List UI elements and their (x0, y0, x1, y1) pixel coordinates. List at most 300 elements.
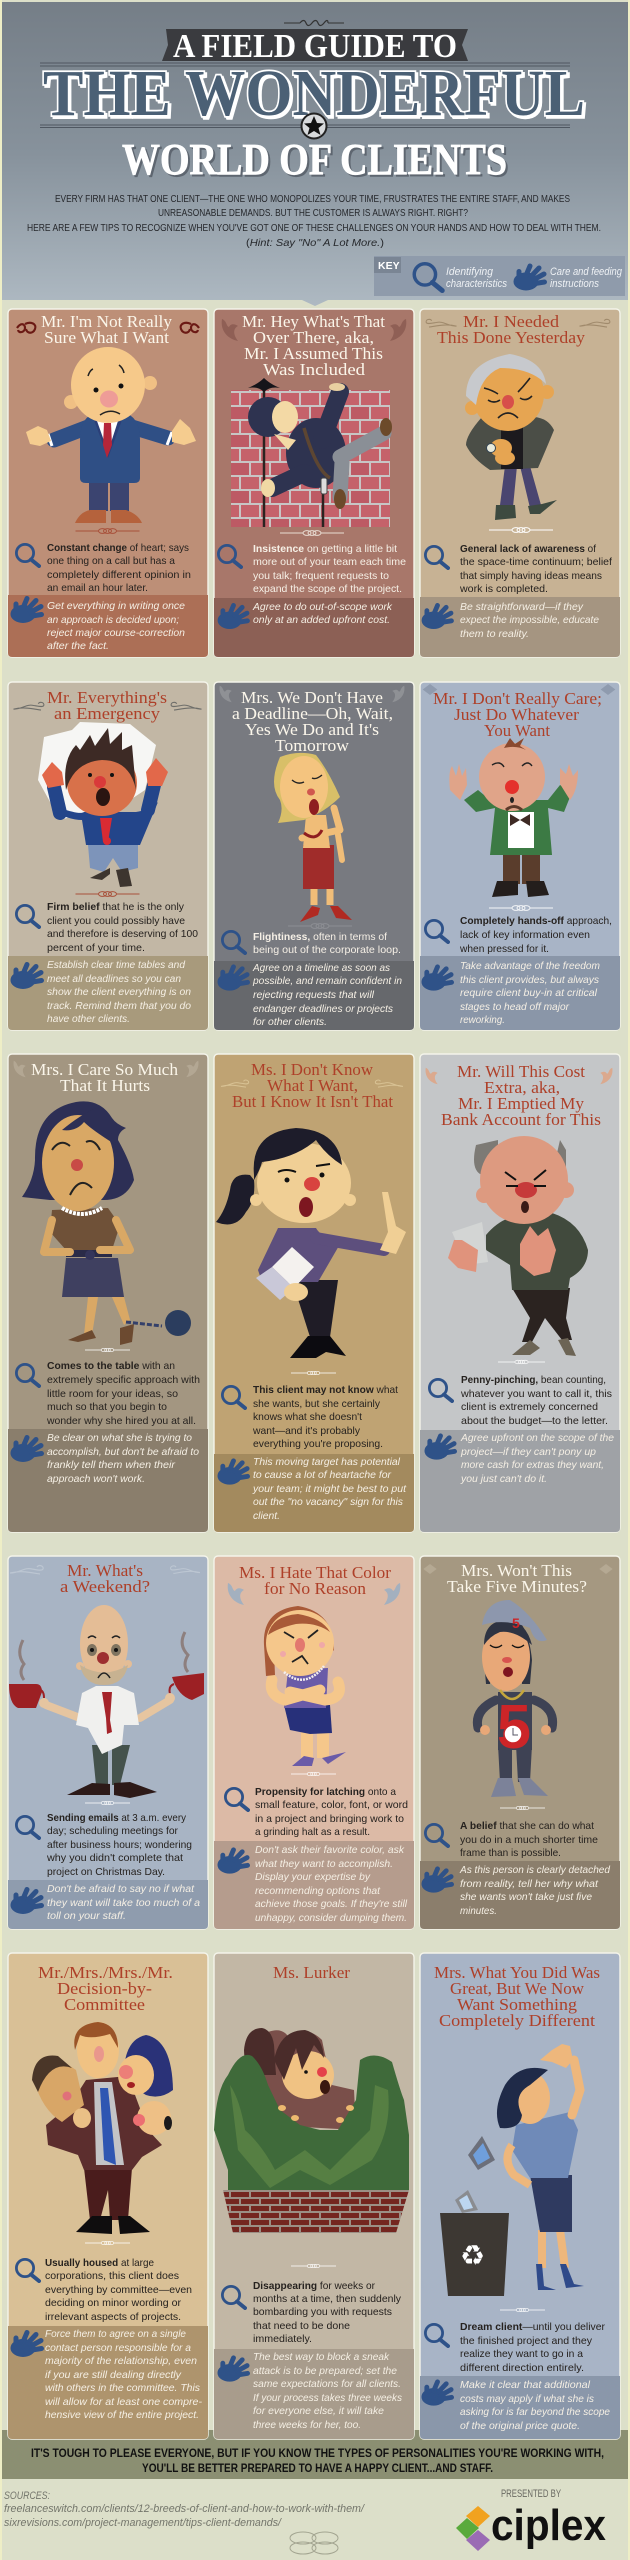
title (232, 688, 393, 755)
identifying characteristics: you do in a much shorter time (460, 1834, 598, 1846)
ornament (426, 1068, 612, 1084)
identifying characteristics: you talk; frequent requests to (253, 570, 389, 582)
care instructions: rejecting requests that will (253, 989, 375, 1001)
character: woman behind hedge (214, 2028, 409, 2233)
identifying characteristics (253, 543, 406, 595)
icon: magnifier (222, 1386, 245, 1408)
identifying characteristics: day; scheduling meetings for (47, 1825, 178, 1837)
identifying characteristics: Flightiness, often in terms of (253, 931, 387, 943)
panel: Mrs. What You Did Was Great (420, 1953, 620, 2439)
care instructions: contact person responsible for a (45, 2342, 191, 2354)
care instructions: possible, and remain confident in (252, 975, 402, 987)
identifying characteristics: client is extremely concerned (461, 1401, 598, 1413)
title (38, 1963, 173, 2014)
identifying characteristics: Dream client—until you deliver (460, 2321, 605, 2333)
character: man checking watch (465, 354, 557, 520)
title: Was Included (263, 360, 366, 379)
icon: magnifier (429, 1379, 452, 1401)
ornament (228, 1583, 400, 1605)
care instructions (252, 962, 402, 1028)
care instructions (47, 1883, 200, 1922)
identifying characteristics: and therefore is deserving of 100 (47, 928, 198, 940)
identifying characteristics: bombarding you with requests (253, 2306, 392, 2318)
ornament (423, 1564, 613, 1574)
care instructions: track. Remind them that you do (47, 1000, 191, 1012)
identifying characteristics: she wants, but she certainly (253, 1398, 381, 1410)
title (437, 312, 586, 347)
sources: SOURCES: (4, 2490, 50, 2502)
care instructions: Don't ask their favorite color, ask (255, 1844, 405, 1856)
identifying characteristics (252, 1384, 398, 1450)
care instructions: minutes. (460, 1905, 497, 1917)
identifying characteristics (459, 915, 612, 955)
identifying characteristics: General lack of awareness of (460, 543, 596, 555)
identifying characteristics: frame than is possible. (460, 1847, 561, 1859)
icon: hand (218, 605, 247, 629)
title: Mr. I Don't Really Care; (433, 689, 602, 708)
panel: Mr. I'm Not Really Sure What I Want (8, 309, 208, 657)
identifying characteristics: Propensity for latching onto a (255, 1786, 396, 1798)
identifying characteristics: project on Christmas Day. (47, 1866, 165, 1878)
icon: magnifier (425, 546, 448, 568)
identifying characteristics: being out of the corporate loop. (253, 944, 401, 956)
care instructions (47, 959, 191, 1025)
identifying characteristics: extremely specific approach with (47, 1374, 200, 1386)
icon: hand (218, 1461, 248, 1484)
panel: Mr. I Needed This Done Yesterday (420, 309, 620, 657)
care instructions: for everyone else, it will take (253, 2405, 384, 2417)
divider (489, 906, 553, 910)
divider (500, 2308, 545, 2312)
identifying characteristics: months at a time, then suddenly (253, 2293, 402, 2305)
key legend: instructions (550, 278, 599, 290)
divider (85, 1801, 130, 1805)
panel: Ms. Lurker (214, 1953, 414, 2439)
panel: Mrs. I Care So Much That It Hurts (8, 1054, 208, 1532)
title: Bank Account for This (441, 1110, 601, 1129)
title: Mr. I Emptied My (458, 1094, 585, 1113)
divider (85, 2241, 130, 2245)
care instructions: she wants won't take just five (460, 1891, 592, 1903)
identifying characteristics: one thing on a call but has a (47, 555, 175, 567)
character: man with bow tie (449, 738, 578, 897)
care instructions: attack is to be prepared; set the (253, 2365, 397, 2377)
care instructions: them to reality. (460, 628, 529, 640)
identifying characteristics: Sending emails at 3 a.m. every (47, 1812, 187, 1824)
title: Mr. Hey What's That (242, 312, 385, 331)
intro text: (Hint: Say "No" A Lot More. ) (246, 237, 384, 249)
title: Mr. I Needed (463, 312, 560, 331)
ornament (14, 702, 202, 710)
sources (4, 2490, 365, 2529)
care instructions: Get everything in writing once (47, 600, 185, 612)
care instructions: costs may apply if what she is (460, 2393, 595, 2405)
divider (85, 1348, 130, 1352)
title (239, 1563, 391, 1598)
icon: magnifier (425, 920, 448, 942)
identifying characteristics: Disappearing for weeks or (253, 2280, 375, 2292)
care instructions (255, 1844, 408, 1924)
care instructions: Agree on a timeline as soon as (252, 962, 391, 974)
icon: hand (11, 1438, 42, 1462)
title: What I Want, (267, 1076, 358, 1095)
identifying characteristics: after business hours; wondering (47, 1839, 192, 1851)
divider (76, 529, 140, 533)
icon: hand (11, 964, 42, 988)
panel: Mrs. We Don't Have a Deadline (214, 682, 414, 1030)
character: woman throwing away work: ♻ (460, 2239, 485, 2272)
divider (489, 528, 553, 532)
identifying characteristics (460, 2321, 605, 2374)
care instructions: If your process takes three weeks (253, 2392, 403, 2404)
panel: Mr. Will This Cost Extra (420, 1054, 620, 1532)
care instructions: The best way to block a sneak (253, 2351, 390, 2363)
care instructions: reworking. (460, 1014, 505, 1026)
heading banner: a field guide to: A FIELD GUIDE TO (173, 28, 457, 65)
identifying characteristics: Usually housed at large (45, 2257, 154, 2269)
character: tired man with coffee (9, 1605, 204, 1798)
title: Over There, aka, (253, 328, 374, 347)
care instructions: accomplish, but don't be afraid to (47, 1446, 199, 1458)
identifying characteristics: much so that you begin to (47, 1401, 167, 1413)
care instructions: Force them to agree on a single (45, 2328, 186, 2340)
character: many-headed committee (32, 2022, 173, 2234)
icon: magnifier (218, 545, 241, 567)
sources: sixrevisions.com/project-management/tips-client-demands/ (4, 2517, 282, 2529)
care instructions: Agree upfront on the scope of the (460, 1432, 614, 1444)
title (447, 1561, 587, 1596)
identifying characteristics: wonder why she hired you at all. (46, 1415, 196, 1427)
divider (76, 892, 140, 896)
identifying characteristics: a grinding halt as a result. (255, 1826, 370, 1838)
panel: Mr. Hey What's That Over There (214, 309, 414, 657)
identifying characteristics: Insistence on getting a little bit (253, 543, 397, 555)
care instructions: meet all deadlines so you can (47, 973, 181, 985)
title: Just Do Whatever (454, 705, 579, 724)
care instructions: this client provides, but always (460, 974, 600, 986)
title: an Emergency (54, 704, 161, 723)
icon: hand (422, 967, 452, 990)
identifying characteristics: work is completed. (459, 583, 548, 595)
title: Mr. Will This Cost (457, 1062, 585, 1081)
icon: magnifier (222, 2286, 245, 2308)
care instructions: majority of the relationship, even (45, 2355, 197, 2367)
care instructions: an approach is decided upon; (47, 614, 179, 626)
identifying characteristics: Completely hands-off approach, (460, 915, 612, 927)
title: Mrs. I Care So Much (31, 1060, 179, 1079)
icon: hand (422, 2382, 452, 2405)
header panel (2, 2, 628, 306)
identifying characteristics (46, 1812, 192, 1878)
character: man climbing brick wall (231, 378, 392, 527)
icon: magnifier (16, 2259, 39, 2281)
title: for No Reason (264, 1579, 367, 1598)
icon: magnifier (16, 1816, 39, 1838)
icon: hand (11, 1890, 42, 1914)
care instructions: for other clients. (253, 1016, 327, 1028)
icon: hand (422, 1869, 452, 1892)
panel: Mr. What's a Weekend (8, 1556, 208, 1929)
divider (288, 924, 352, 928)
ornament (221, 1080, 403, 1087)
title (441, 1062, 601, 1129)
title: Mr. I Assumed This (244, 344, 383, 363)
care instructions: endanger deadlines or projects (253, 1003, 394, 1015)
care instructions (460, 601, 599, 640)
care instructions (460, 2379, 610, 2432)
care instructions: unhappy, consider dumping them. (255, 1912, 407, 1924)
identifying characteristics: little room for your ideas, so (47, 1388, 178, 1400)
care instructions: of the original price quote. (460, 2420, 580, 2432)
character: penny-pinching man (448, 1136, 588, 1356)
panel: Mr. I Don't Really Care (420, 682, 620, 1030)
care instructions: only at an added upfront cost. (253, 614, 390, 626)
identifying characteristics: in a project and bringing work to (255, 1813, 404, 1825)
title: Sure What I Want (44, 328, 169, 347)
identifying characteristics: want—and it's probably (252, 1425, 361, 1437)
identifying characteristics (253, 2280, 402, 2345)
ornament (222, 319, 406, 341)
identifying characteristics: immediately. (253, 2333, 312, 2345)
title: Extra, aka, (484, 1078, 560, 1097)
care instructions (252, 601, 393, 626)
identifying characteristics: the finished project and they (460, 2335, 593, 2347)
divider (291, 2264, 336, 2268)
divider (280, 531, 344, 535)
care instructions: if you are still dealing directly (45, 2369, 182, 2381)
identifying characteristics (47, 901, 198, 954)
icon: magnifier (425, 2324, 448, 2346)
title: a Deadline—Oh, Wait, (232, 704, 393, 723)
identifying characteristics (253, 931, 401, 956)
icon: hand (218, 967, 248, 990)
care instructions: out the "no vacancy" sign for this (253, 1496, 404, 1508)
title: Take Five Minutes? (447, 1577, 587, 1596)
title: Mr. What's (67, 1561, 143, 1580)
identifying characteristics: deciding on minor wording or (45, 2297, 182, 2309)
title: Want Something (457, 1995, 578, 2014)
identifying characteristics: corporations, this client does (45, 2270, 179, 2282)
care instructions: frankly tell them when their (47, 1459, 176, 1471)
care instructions: project—if they can't pony up (460, 1446, 596, 1458)
title: Tomorrow (275, 736, 350, 755)
title: That It Hurts (60, 1076, 150, 1095)
icon: hand (425, 1436, 455, 1459)
heading: the wonderful: THE WONDERFUL (43, 57, 585, 130)
key legend: characteristics (446, 278, 507, 290)
care instructions: reject major course-correction (47, 627, 185, 639)
identifying characteristics: irrelevant aspects of projects. (45, 2311, 181, 2323)
icon: hand (218, 2358, 248, 2381)
panel: Ms. I Hate That Color (214, 1556, 414, 1929)
title: Ms. I Hate That Color (239, 1563, 391, 1582)
care instructions: Display your expertise by (255, 1871, 371, 1883)
care instructions: three weeks for her, too. (253, 2419, 361, 2431)
character: woman with ball and chain (22, 1101, 191, 1345)
icon: star badge (302, 114, 326, 138)
character: woman with ponytail (216, 1128, 406, 1358)
care instructions: will allow for at least one compre- (45, 2396, 203, 2408)
care instructions: stages to head off major (460, 1001, 569, 1013)
identifying characteristics: everything you're proposing. (253, 1438, 383, 1450)
key legend (374, 256, 625, 296)
title: Mrs. What You Did Was (434, 1963, 600, 1982)
care instructions: they want will take too much of a (47, 1897, 200, 1909)
care instructions: achieve those goals. If they're still (255, 1898, 408, 1910)
care instructions: asking for is far beyond the scope (460, 2406, 610, 2418)
title (60, 1561, 150, 1596)
care instructions: This moving target has potential (253, 1456, 401, 1468)
divider (498, 1360, 545, 1364)
ornament (423, 684, 615, 695)
care instructions: have other clients. (47, 1013, 130, 1025)
care instructions: Establish clear time tables and (47, 959, 186, 971)
title: Decision-by- (57, 1979, 152, 1998)
icon: magnifier (16, 905, 39, 927)
title: Mr. I'm Not Really (41, 312, 172, 331)
care instructions: after the fact. (47, 640, 109, 652)
title: Yes We Do and It's (245, 720, 379, 739)
footer band background (2, 2430, 628, 2479)
title (434, 1963, 600, 2030)
character: panicking man (38, 722, 168, 887)
divider (291, 1772, 336, 1776)
icon: magnifier (16, 1364, 39, 1386)
care instructions: expect the impossible, educate (460, 614, 599, 626)
care instructions: from reality, tell her why what (460, 1878, 599, 1890)
identifying characteristics: completely different opinion in (47, 569, 191, 581)
identifying characteristics: whatever you want to call it, this (460, 1388, 612, 1400)
icon: magnifier (222, 931, 245, 953)
title: Mrs. We Don't Have (241, 688, 383, 707)
identifying characteristics: why you didn't complete that (46, 1852, 183, 1864)
title: You Want (484, 721, 550, 740)
care instructions (460, 1432, 614, 1485)
care instructions: to cause a lot of heartache for (253, 1469, 391, 1481)
care instructions (459, 1864, 611, 1917)
care instructions: approach won't work. (47, 1473, 145, 1485)
care instructions: As this person is clearly detached (459, 1864, 611, 1876)
ornament (10, 1566, 200, 1574)
identifying characteristics: small feature, color, font, or word (255, 1799, 408, 1811)
identifying characteristics (459, 543, 612, 595)
care instructions (253, 2351, 403, 2431)
character: woman throwing away work (440, 2044, 584, 2296)
title: Completely Different (439, 2011, 595, 2030)
intro text (27, 193, 601, 249)
character: woman with crossed arms (264, 1606, 346, 1766)
sources: freelanceswitch.com/clients/12-breeds-of-client-and-how-to-work-with-them/ (4, 2503, 365, 2515)
logo: ciplex: ciplex (491, 2501, 606, 2550)
title: Ms. I Don't Know (251, 1060, 374, 1079)
title: Great, But We Now (450, 1979, 585, 1998)
care instructions: show the client everything is on (47, 986, 191, 998)
identifying characteristics: knows what she doesn't (253, 1411, 362, 1423)
icon: hand (218, 1850, 248, 1873)
care instructions: hensive view of the entire project. (45, 2409, 199, 2421)
character: woman with number five: 5 (497, 1693, 531, 1762)
title (41, 312, 172, 347)
key legend: KEY (378, 260, 400, 272)
care instructions: Be clear on what she is trying to (47, 1432, 192, 1444)
title (433, 689, 602, 740)
identifying characteristics: Constant change of heart; says (47, 542, 189, 554)
identifying characteristics: when pressed for it. (459, 943, 549, 955)
title: Committee (64, 1995, 145, 2014)
identifying characteristics (460, 1820, 598, 1859)
care instructions: recommending options that (255, 1885, 381, 1897)
care instructions (47, 600, 185, 652)
title: Mr./Mrs./Mrs./Mr. (38, 1963, 173, 1982)
care instructions: you just can't do it. (460, 1473, 547, 1485)
character: blonde woman (274, 753, 352, 922)
care instructions: client. (253, 1510, 280, 1522)
panel: Ms. I Don't Know What I Want (214, 1054, 414, 1532)
panel: Mrs. Won't This Take Five Minutes (420, 1556, 620, 1929)
identifying characteristics: that need to be done (253, 2320, 350, 2332)
identifying characteristics: different direction entirely. (460, 2362, 584, 2374)
identifying characteristics: about the budget—to the letter. (461, 1415, 608, 1427)
character: shrugging bald man (26, 347, 196, 523)
icon: hand (11, 2332, 42, 2356)
title: Mr. Everything's (47, 688, 167, 707)
care instructions: more cash for extras they want, (461, 1459, 604, 1471)
identifying characteristics: Firm belief that he is the only (47, 901, 185, 913)
identifying characteristics: lack of key information even (460, 929, 590, 941)
ornament: footer flourish (290, 2532, 338, 2554)
character: woman with number five (477, 1600, 553, 1797)
key legend: Identifying (446, 266, 494, 278)
care instructions (460, 960, 600, 1026)
intro text: UNREASONABLE DEMANDS. BUT THE CUSTOMER IS ALWAYS RIGHT. RIGHT? (158, 207, 468, 219)
care instructions (252, 1456, 407, 1522)
care instructions: what they want to accomplish. (255, 1858, 393, 1870)
identifying characteristics: Penny-pinching, bean counting, (461, 1374, 606, 1386)
ornament: header flourish (284, 20, 344, 26)
identifying characteristics: percent of your time. (47, 942, 145, 954)
icon: magnifier (425, 1824, 448, 1846)
ornament (220, 686, 404, 702)
ornament (14, 1061, 198, 1077)
title: But I Know It Isn't That (232, 1092, 393, 1111)
divider (291, 1371, 336, 1375)
care instructions: Be straightforward—if they (460, 601, 584, 613)
title: a Weekend? (60, 1577, 150, 1596)
icon: hand (422, 605, 451, 629)
title: This Done Yesterday (437, 328, 586, 347)
ornament (426, 319, 610, 327)
care instructions: with others in the committee. This (45, 2382, 201, 2394)
identifying characteristics (45, 2257, 192, 2323)
divider (500, 1806, 545, 1810)
identifying characteristics: Comes to the table with an (47, 1360, 175, 1372)
identifying characteristics: an email an hour later. (47, 582, 148, 594)
title: Ms. Lurker (273, 1963, 350, 1982)
icon: hand (11, 598, 42, 622)
panel: Mr. Everything's an Emergency (8, 682, 208, 1030)
closing statement (31, 2448, 604, 2475)
identifying characteristics (460, 1374, 612, 1427)
care instructions: Don't be afraid to say no if what (47, 1883, 195, 1895)
icon: magnifier (16, 544, 39, 566)
identifying characteristics: everything by committee—even (45, 2284, 192, 2296)
icon: magnifier (225, 1788, 248, 1810)
care instructions: toll on your staff. (47, 1910, 126, 1922)
identifying characteristics: realize they want to go in a (460, 2348, 583, 2360)
presented by: PRESENTED BY (501, 2488, 561, 2500)
care instructions (45, 2328, 203, 2421)
care instructions: Make it clear that additional (460, 2379, 591, 2391)
